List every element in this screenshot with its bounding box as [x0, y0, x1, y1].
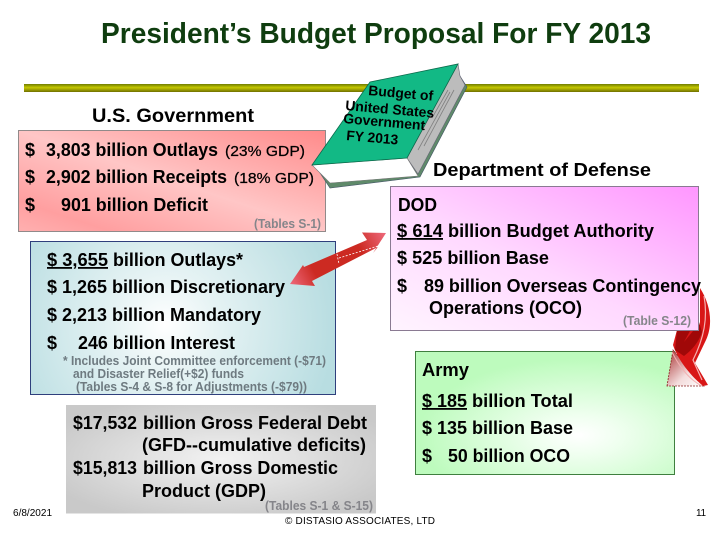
panel: federal debt and GDP: billion Gross Domestic	[143, 458, 338, 478]
panel: Army: $ 185	[422, 391, 467, 411]
arrow: DOD to Army	[667, 288, 710, 386]
book title: Government	[343, 110, 426, 133]
panel: outlays: $ 3,655	[47, 250, 108, 270]
panel: federal debt and GDP: Product (GDP)	[142, 481, 266, 501]
footer: page number: 11	[696, 508, 706, 519]
panel: Army	[416, 352, 674, 474]
book title: FY 2013	[346, 127, 399, 148]
footer: date: 6/8/2021	[13, 508, 52, 519]
panel: government totals	[18, 130, 326, 232]
panel: government totals: $	[25, 195, 35, 215]
panel: outlays	[30, 242, 336, 394]
panel: DOD: (Table S-12)	[623, 314, 691, 328]
panel: federal debt and GDP: (Tables S-1 & S-15)	[265, 499, 373, 513]
panel: outlays: 246 billion Interest	[78, 333, 235, 353]
panel: DOD: Operations (OCO)	[429, 298, 582, 318]
panel: federal debt and GDP: $17,532	[73, 413, 137, 433]
panel: government totals: (Tables S-1)	[254, 217, 321, 231]
arrow: double-headed link between outlays and DOD	[290, 232, 386, 286]
panel: Army: 50 billion OCO	[448, 446, 570, 466]
panel: outlays: $	[47, 333, 57, 353]
panel: Army: billion Total	[472, 391, 573, 411]
panel: government totals: 3,803 billion Outlays	[46, 140, 218, 160]
panel: outlays: (Tables S-4 & S-8 for Adjustments (-$79))	[76, 380, 307, 394]
panel: DOD: 89 billion Overseas Contingency	[424, 276, 701, 296]
panel: federal debt and GDP: (GFD--cumulative deficits)	[142, 435, 366, 455]
title rule	[24, 84, 699, 92]
panel: Army: $	[422, 446, 432, 466]
panel: federal debt and GDP: $15,813	[73, 458, 137, 478]
book title: United States	[345, 97, 435, 121]
panel: DOD: DOD	[398, 195, 437, 215]
panel: federal debt and GDP	[66, 405, 376, 514]
heading: Department of Defense: Department of Defense	[433, 160, 651, 180]
panel: government totals: (18% GDP)	[234, 170, 314, 187]
icon: budget book	[312, 64, 467, 188]
panel: DOD: billion Budget Authority	[448, 221, 654, 241]
panel: outlays: billion Outlays*	[113, 250, 243, 270]
panel: government totals: (23% GDP)	[225, 143, 305, 160]
book title: Budget of	[368, 82, 434, 104]
panel: Army: $ 135 billion Base	[422, 418, 573, 438]
panel: outlays: * Includes Joint Committee enforcement (-$71)	[63, 354, 326, 368]
heading: U.S. Government: U.S. Government	[92, 106, 255, 127]
panel: government totals: 2,902 billion Receipts	[46, 167, 227, 187]
book title	[343, 82, 435, 148]
panel: government totals: $	[25, 167, 35, 187]
panel: outlays: and Disaster Relief(+$2) funds	[73, 367, 244, 381]
panel: DOD	[390, 186, 701, 330]
panel: outlays: $ 2,213 billion Mandatory	[47, 305, 261, 325]
panel: federal debt and GDP: billion Gross Federal Debt	[143, 413, 367, 433]
panel: Army: Army	[422, 360, 469, 380]
panel: outlays: $ 1,265 billion Discretionary	[47, 277, 285, 297]
panel: DOD: $ 525 billion Base	[397, 248, 549, 268]
panel: DOD: $	[397, 276, 407, 296]
title: President’s Budget Proposal For FY 2013	[101, 18, 651, 50]
panel: government totals: $	[25, 140, 35, 160]
panel: government totals: 901 billion Deficit	[61, 195, 208, 215]
panel: DOD: $ 614	[397, 221, 443, 241]
footer: copyright: © DISTASIO ASSOCIATES, LTD	[285, 516, 435, 527]
